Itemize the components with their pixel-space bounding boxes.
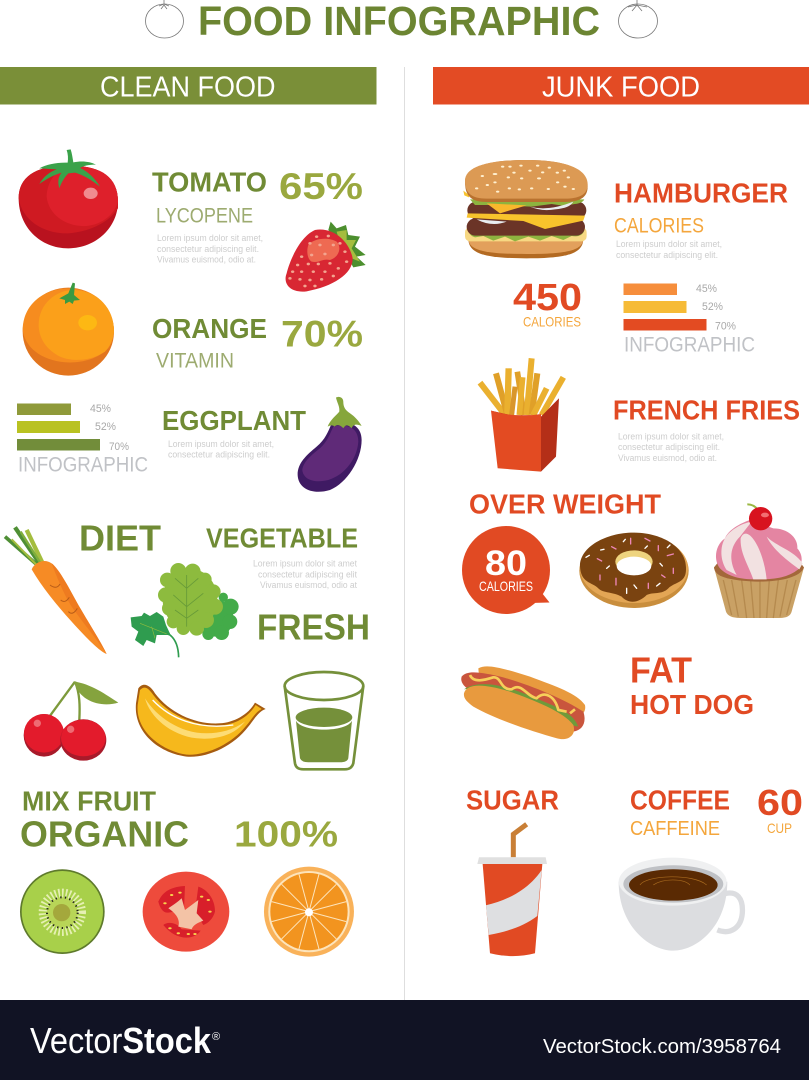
footer bar [0, 1000, 809, 1080]
icon: cherries [24, 682, 118, 761]
icon: kiwi slice [20, 869, 105, 954]
heading: coffee: COFFEE [630, 784, 730, 816]
text block: vegetable description [253, 558, 357, 590]
icon: hot dog [461, 666, 585, 739]
icon: coffee cup [619, 858, 742, 951]
icon: glass of juice [285, 672, 363, 769]
stat: 65%: 65% [279, 166, 363, 207]
icon: lettuce and parsley [131, 563, 239, 657]
text block: vegetable description: Vivamus euismod, odio at [260, 580, 357, 590]
text block: french fries description: Lorem ipsum dolor sit amet, [618, 432, 724, 442]
bar chart: orange infographic [624, 283, 755, 356]
text block: eggplant description [168, 439, 274, 460]
bar chart: orange infographic: INFOGRAPHIC [624, 334, 755, 356]
text block: tomato description [157, 233, 263, 264]
stat: 70%: 70% [281, 314, 363, 354]
icon: tomato slice [143, 872, 229, 952]
icon: right tomato outline [618, 0, 658, 38]
text block: hamburger description: Lorem ipsum dolor sit amet, [616, 239, 722, 249]
logo: VectorStock: ® [212, 1031, 220, 1043]
heading: hot dog: HOT DOG [630, 689, 754, 720]
bar chart: green infographic [17, 403, 148, 476]
subheading: lycopene: LYCOPENE [156, 204, 253, 228]
panel: junk food [433, 67, 809, 956]
heading: fat: FAT [630, 650, 692, 690]
icon: left tomato outline [146, 0, 184, 38]
text block: tomato description: Vivamus euismod, odio at. [157, 254, 256, 264]
bar chart: green infographic: 52% [95, 421, 116, 433]
icon: donut [579, 533, 689, 608]
bar chart: green infographic: INFOGRAPHIC [18, 454, 148, 476]
text block: eggplant description: Lorem ipsum dolor sit amet, [168, 439, 274, 449]
text block: tomato description: Lorem ipsum dolor sit amet, [157, 233, 263, 243]
icon: eggplant [298, 397, 362, 492]
heading: eggplant: EGGPLANT [162, 405, 306, 436]
stat: 60 cup: 60 [757, 782, 803, 823]
text block: vegetable description: Lorem ipsum dolor sit amet [253, 558, 357, 568]
stat: 450 calories: 450 [513, 277, 582, 319]
bar chart: green infographic: 45% [90, 403, 111, 415]
icon: carrot [5, 527, 107, 654]
text block: vegetable description: consectetur adipiscing elit [258, 570, 357, 580]
bar chart: orange infographic: 70% [715, 320, 736, 332]
icon: cupcake [714, 504, 804, 618]
text block: french fries description: consectetur adipiscing elit. [618, 442, 720, 452]
text block: hamburger description [616, 239, 722, 260]
icon: french fries [480, 358, 563, 472]
callout: 80 calories: CALORIES [479, 578, 533, 594]
heading: over weight: OVER WEIGHT [469, 488, 661, 520]
icon: hamburger [463, 160, 588, 258]
bar chart: green infographic: 70% [109, 441, 129, 453]
heading: hamburger: HAMBURGER [614, 178, 788, 208]
heading: organic: ORGANIC [20, 814, 189, 854]
callout: 80 calories [462, 526, 550, 614]
subheading: calories: CALORIES [614, 214, 704, 238]
icon: orange slice [264, 867, 354, 957]
icon: strawberry [286, 222, 366, 292]
heading: fresh: FRESH [257, 606, 370, 648]
banner: clean food: CLEAN FOOD [100, 72, 276, 104]
text block: french fries description: Vivamus euismod, odio at. [618, 453, 717, 463]
banner: clean food [0, 67, 376, 104]
title block [146, 0, 658, 44]
icon: orange [23, 283, 114, 376]
text block: french fries description [618, 432, 724, 463]
text block: tomato description: consectetur adipiscing elit. [157, 244, 259, 254]
subheading: caffeine: CAFFEINE [630, 818, 720, 840]
logo: VectorStock: VectorStock [30, 1020, 212, 1061]
banner: junk food [433, 67, 809, 104]
stat: 100%: 100% [234, 814, 338, 854]
heading: sugar: SUGAR [466, 784, 559, 816]
heading: diet: DIET [79, 518, 161, 558]
heading: tomato: TOMATO [152, 166, 267, 198]
text block: eggplant description: consectetur adipiscing elit. [168, 450, 270, 460]
banner: junk food: JUNK FOOD [542, 72, 700, 104]
stat: 60 cup [757, 782, 803, 836]
icon: banana [136, 685, 266, 757]
text block: hamburger description: consectetur adipiscing elit. [616, 250, 718, 260]
heading: mix fruit: MIX FRUIT [22, 786, 156, 816]
subheading: vitamin: VITAMIN [156, 350, 234, 372]
footer reference text: VectorStock.com/3958764 [543, 1036, 781, 1058]
callout: 80 calories: 80 [485, 544, 527, 583]
stat: 450 calories: CALORIES [523, 314, 581, 330]
heading: vegetable: VEGETABLE [206, 522, 358, 554]
icon: soda cup [477, 824, 547, 956]
bar chart: orange infographic: 52% [702, 301, 723, 313]
stat: 60 cup: CUP [767, 820, 792, 836]
bar chart: orange infographic: 45% [696, 283, 717, 295]
icon: tomato [19, 149, 118, 248]
heading: orange: ORANGE [152, 313, 267, 344]
panel: clean food [0, 67, 376, 957]
